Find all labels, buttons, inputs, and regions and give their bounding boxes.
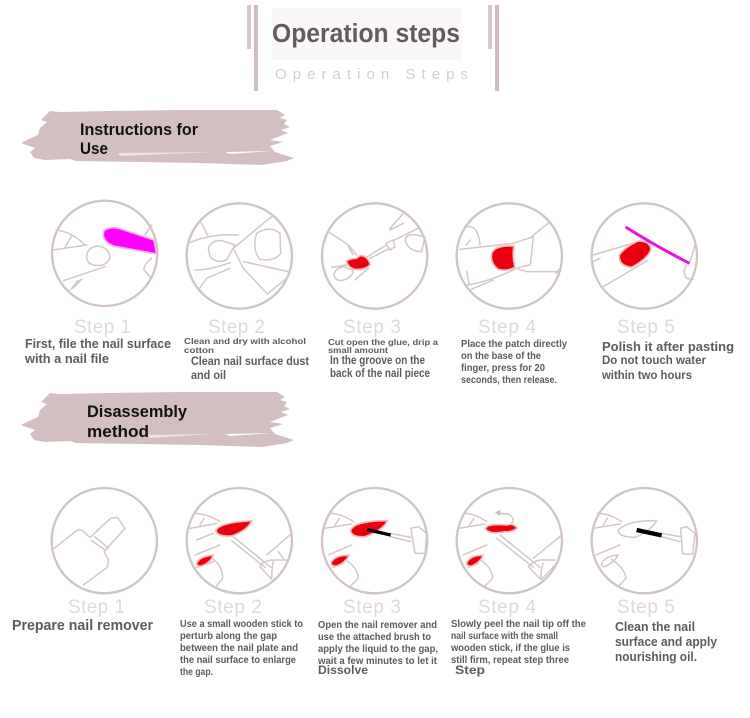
text: step 4 instructions: [461, 339, 567, 386]
text: removal step 4: Slowly peel the nail tip off the: [451, 619, 586, 630]
step labels row 2: Step 3: [343, 597, 401, 618]
text: step 2 instructions: [184, 337, 309, 382]
step labels row 1: Step 5: [617, 317, 675, 338]
icon: brushing remover on nail: [322, 488, 427, 593]
text: step 2 instructions: cotton: [184, 346, 214, 355]
step labels row 1: Step 2: [208, 317, 265, 338]
step labels row 1: [74, 317, 675, 338]
icon: nail remover bottle: [52, 488, 157, 593]
heading: Instructions for Use: [21, 110, 294, 165]
icon: placing the patch: [457, 203, 562, 309]
step labels row 2: Step 4: [478, 597, 536, 618]
icon: cleaning with alcohol cotton: [187, 203, 292, 309]
text: removal step 2: the gap.: [180, 667, 213, 678]
text: step 2 instructions: Clean nail surface dust: [191, 354, 309, 368]
text: removal step 3: [317, 620, 438, 677]
text: step 3 instructions: back of the nail piece: [330, 366, 430, 380]
text: removal step 4: still firm, repeat step three: [451, 655, 569, 666]
text: step 3 instructions: In the groove on the: [330, 353, 425, 367]
title block: Operation Steps: [275, 66, 468, 83]
text: step 5 instructions: Do not touch water: [602, 353, 706, 367]
text: step 2 instructions: Clean and dry with alcohol: [184, 337, 306, 346]
heading: Disassembly method: [21, 392, 294, 447]
text: removal step 2: Use a small wooden stick to: [180, 619, 303, 630]
text: removal step 3: apply the liquid to the gap,: [318, 644, 438, 655]
heading: Disassembly method: method: [87, 422, 149, 441]
step labels row 1: Step 3: [343, 317, 401, 338]
icon: wooden stick under nail: [187, 488, 292, 593]
text: removal step 3: Open the nail remover and: [318, 620, 437, 631]
step labels row 2: Step 2: [204, 597, 262, 618]
step labels row 2: [68, 597, 675, 618]
title block: Operation steps: [272, 20, 460, 48]
icon: applying nourishing oil: [592, 488, 697, 593]
icon: applying glue: [322, 203, 427, 309]
text: removal step 3: wait a few minutes to let it: [317, 656, 438, 667]
text: removal step 2: [180, 619, 303, 678]
text: removal step 2: perturb along the gap: [180, 631, 277, 642]
step labels row 2: Step 5: [617, 597, 675, 618]
icon: polishing the nail: [592, 203, 697, 309]
text: step 5 instructions: within two hours: [601, 368, 692, 382]
heading: Disassembly method: Disassembly: [87, 402, 188, 421]
text: prepare nail remover: Prepare nail remover: [12, 617, 153, 634]
text: step 3 instructions: [328, 338, 439, 380]
text: step 4 instructions: on the base of the: [461, 351, 541, 362]
text: step 2 instructions: and oil: [191, 368, 226, 382]
text: step 5 instructions: Polish it after pasting: [602, 339, 734, 354]
text: removal step 4: Step: [455, 663, 485, 677]
text: step 5 instructions: [601, 339, 734, 382]
step labels row 2: Step 1: [68, 597, 125, 618]
step labels row 1: Step 1: [74, 317, 131, 338]
text: removal step 2: the nail surface to enlarge: [180, 655, 296, 666]
text: removal step 5: [615, 619, 718, 664]
heading: Instructions for Use: Instructions for: [80, 120, 198, 139]
text: step 1 instructions: First, file the nail surface: [25, 336, 171, 351]
text: removal step 2: between the nail plate and: [180, 643, 298, 654]
text: step 3 instructions: small amount: [328, 346, 388, 355]
step labels row 1: Step 4: [478, 317, 536, 338]
text: step 3 instructions: Cut open the glue, drip a: [328, 338, 439, 347]
text: removal step 4: nail surface with the small: [451, 631, 558, 642]
title block: [247, 5, 499, 91]
icon: peeling the nail tip: [457, 488, 562, 593]
text: removal step 3: Dissolve: [318, 663, 368, 677]
text: step 4 instructions: Place the patch directly: [461, 339, 567, 350]
heading: Instructions for Use: Use: [80, 139, 108, 158]
text: step 1 instructions: with a nail file: [24, 351, 109, 366]
text: removal step 5: surface and apply: [615, 634, 718, 649]
icon: filing the nail: [52, 201, 157, 306]
text: removal step 5: Clean the nail: [615, 619, 695, 634]
text: step 4 instructions: seconds, then release.: [461, 375, 557, 386]
text: removal step 5: nourishing oil.: [615, 649, 697, 664]
text: step 4 instructions: finger, press for 20: [461, 363, 545, 374]
text: removal step 4: wooden stick, if the glue is: [450, 643, 570, 654]
text: removal step 4: [450, 619, 586, 677]
text: removal step 3: use the attached brush to: [318, 632, 431, 643]
text: step 1 instructions: [24, 336, 171, 366]
